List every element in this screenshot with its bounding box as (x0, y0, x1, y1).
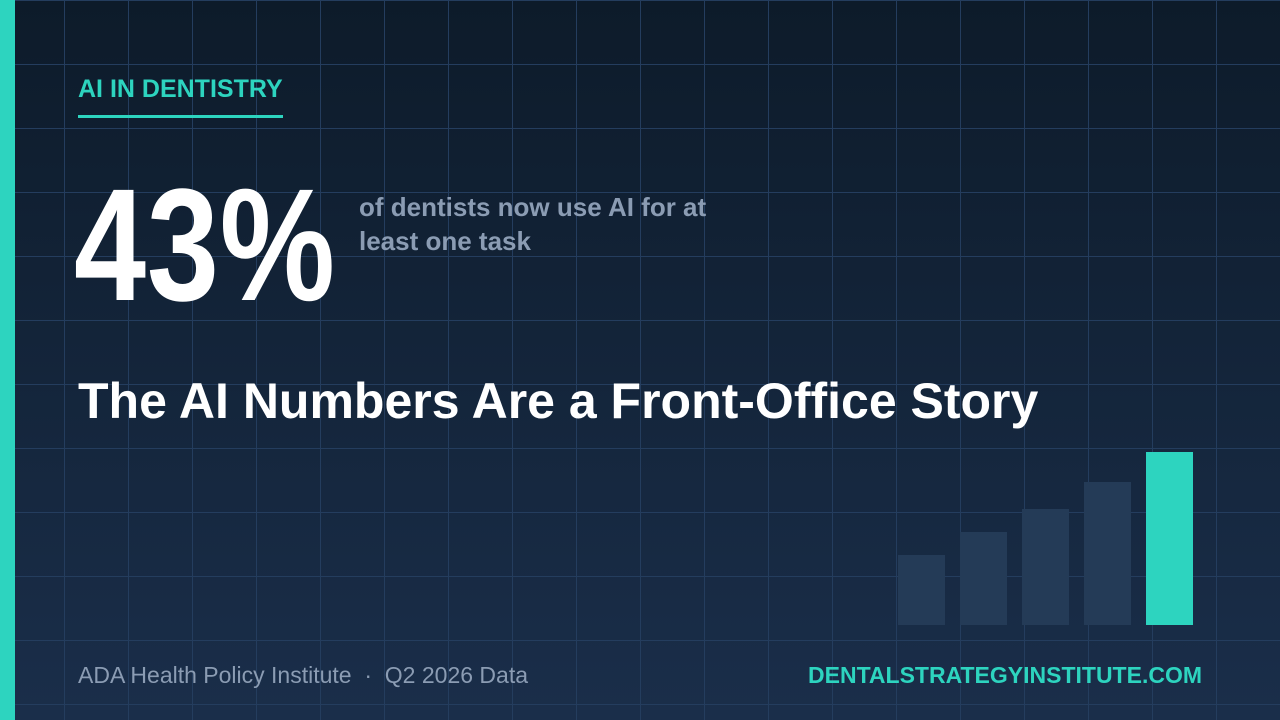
footer source: ADA Health Policy Institute · Q2 2026 Data (78, 662, 528, 688)
bar chart: rising trend (898, 452, 1193, 625)
bar 4 (1084, 482, 1131, 625)
tag heading: AI in Dentistry (78, 74, 283, 118)
stat description: of dentists now use AI for at least one task (359, 192, 706, 256)
footer website: DENTALSTRATEGYINSTITUTE.COM (808, 662, 1202, 688)
bar 5 highlighted (1146, 452, 1193, 625)
main title: The AI Numbers Are a Front-Office Story (78, 373, 1038, 429)
tag heading: AI in Dentistry: AI IN DENTISTRY (78, 75, 283, 103)
big stat: 43%: 43% (74, 155, 336, 334)
bar 3 (1022, 509, 1069, 625)
bar 2 (960, 532, 1007, 625)
bar 1 (898, 555, 945, 625)
left accent bar (0, 0, 15, 720)
